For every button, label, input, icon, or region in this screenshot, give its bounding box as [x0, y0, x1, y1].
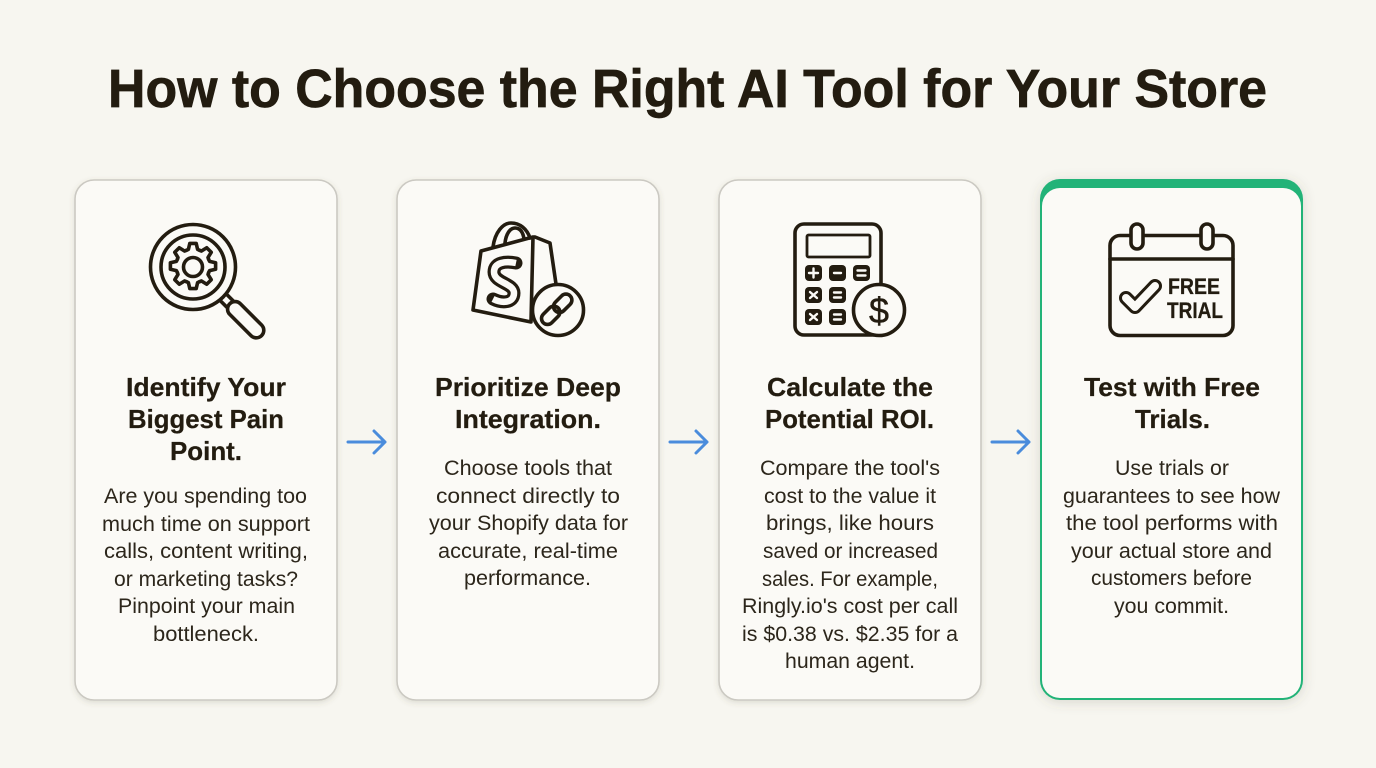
icon: calendar free trial: TRIAL — [1167, 298, 1223, 323]
body text: you commit. — [1114, 595, 1229, 618]
heading: Biggest Pain — [128, 404, 284, 434]
panel: deep integration — [397, 180, 659, 700]
body text — [102, 485, 310, 646]
icon: shopping bag with link — [473, 223, 584, 336]
heading: Integration. — [455, 404, 601, 434]
body text: accurate, real-time — [438, 540, 618, 563]
heading: Point. — [170, 436, 242, 466]
body text: performance. — [464, 567, 591, 590]
body text: human agent. — [785, 650, 915, 673]
body text: saved or increased — [763, 540, 938, 563]
body text: customers before — [1091, 567, 1252, 590]
heading — [126, 372, 286, 466]
heading: Test with Free — [1084, 372, 1260, 402]
heading: Potential ROI. — [765, 404, 934, 434]
heading: Trials. — [1135, 404, 1210, 434]
body text: Are you spending too — [104, 485, 307, 508]
body text — [742, 457, 958, 673]
heading — [435, 372, 621, 434]
body text: connect directly to — [436, 485, 620, 508]
arrow 1 — [348, 431, 385, 453]
title: How to Choose the Right AI Tool for Your Store — [108, 59, 1267, 119]
body text: or marketing tasks? — [114, 568, 298, 591]
body text: your Shopify data for — [429, 512, 628, 535]
heading — [765, 372, 934, 434]
body text: bottleneck. — [153, 623, 259, 646]
body text: Pinpoint your main — [118, 595, 295, 618]
body text — [1063, 457, 1281, 618]
heading: Prioritize Deep — [435, 372, 621, 402]
panel: potential ROI — [719, 180, 981, 700]
icon: magnifying glass with gear — [150, 224, 267, 341]
body text: Choose tools that — [444, 457, 612, 480]
body text: brings, like hours — [766, 512, 934, 535]
icon: calculator with dollar coin — [795, 224, 904, 336]
body text: Ringly.io's cost per call — [742, 595, 958, 618]
icon: calculator with dollar coin: $ — [869, 290, 889, 331]
panel: identify pain point — [75, 180, 337, 700]
body text: the tool performs with — [1066, 512, 1278, 535]
body text: calls, content writing, — [104, 540, 308, 563]
arrow 3 — [992, 431, 1029, 453]
body text: Use trials or — [1115, 457, 1229, 480]
heading: Identify Your — [126, 372, 286, 402]
icon: calendar free trial — [1110, 224, 1233, 336]
heading: Calculate the — [767, 372, 933, 402]
body text — [429, 457, 628, 590]
panel: free trials (highlighted) — [1040, 179, 1303, 700]
body text: is $0.38 vs. $2.35 for a — [742, 623, 958, 646]
body text: sales. For example, — [762, 568, 938, 591]
icon: calendar free trial: FREE — [1168, 274, 1220, 299]
body text: cost to the value it — [764, 485, 936, 508]
heading — [1084, 372, 1260, 434]
body text: much time on support — [102, 513, 310, 536]
body text: Compare the tool's — [760, 457, 940, 480]
body text: your actual store and — [1071, 540, 1272, 563]
body text: guarantees to see how — [1063, 485, 1281, 508]
arrow 2 — [670, 431, 707, 453]
